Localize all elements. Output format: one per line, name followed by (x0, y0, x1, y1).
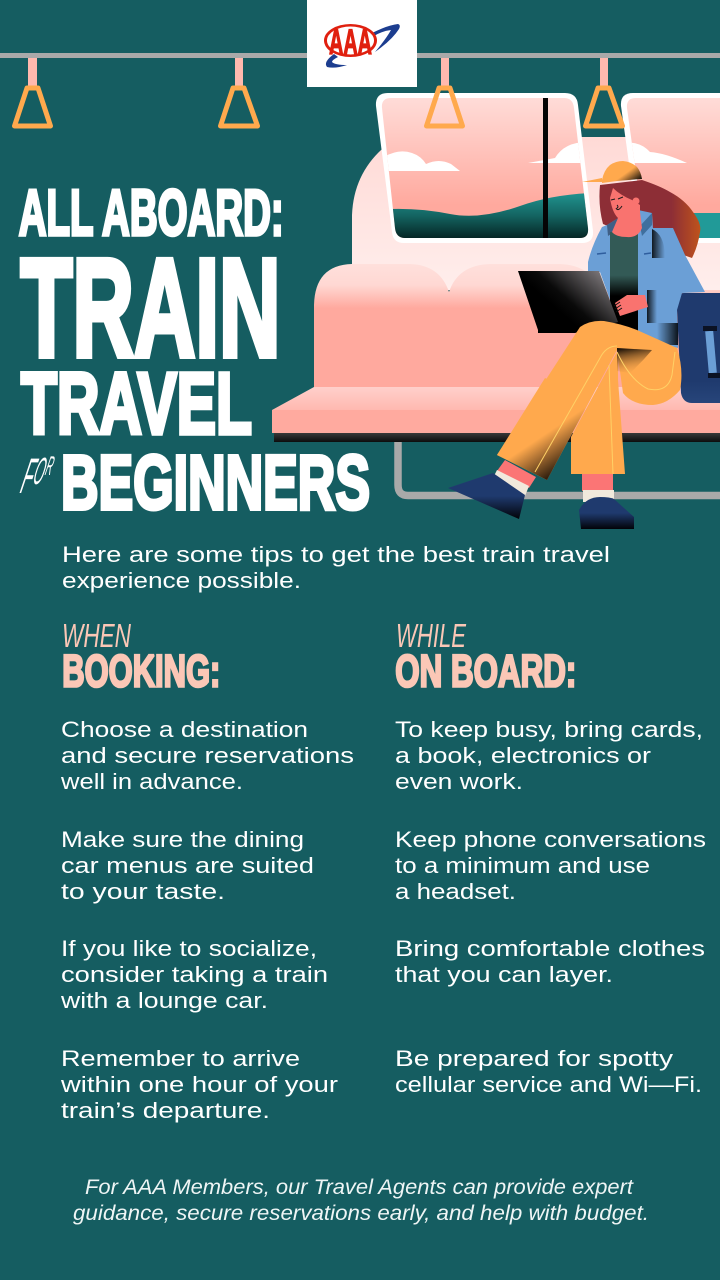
on board tips: Bring comfortable clothes (395, 936, 705, 961)
booking tips: to your taste. (61, 879, 225, 904)
seat cushions (314, 264, 720, 387)
neck and face (610, 188, 642, 237)
on board tips: cellular service and Wi—Fi. (395, 1072, 702, 1097)
cap (602, 161, 642, 183)
seat back upper (352, 137, 720, 290)
booking tips: well in advance. (60, 769, 243, 794)
heading: when booking (62, 617, 220, 697)
jacket (588, 210, 705, 348)
bag (677, 293, 720, 403)
heading: when booking: WHEN (62, 617, 131, 654)
title: TRAVEL (21, 356, 252, 453)
hanging straps (14, 58, 622, 126)
heading: while on board (395, 617, 576, 697)
title: O (29, 452, 51, 493)
AAA logo: AAA (329, 23, 372, 62)
seat base (272, 387, 720, 442)
booking tips: car menus are suited (61, 853, 314, 878)
title: BEGINNERS (61, 440, 370, 526)
laptop (518, 271, 618, 333)
title: R (43, 452, 57, 481)
right sock and shoe (579, 474, 634, 529)
AAA logo (307, 0, 417, 87)
booking tips: consider taking a train (61, 962, 328, 987)
train window left (376, 93, 593, 243)
booking tips: train’s departure. (61, 1098, 270, 1123)
ear (632, 198, 640, 204)
intro text (62, 542, 610, 593)
crossed leg (497, 321, 681, 480)
hair (599, 180, 700, 258)
handrail (0, 53, 720, 58)
title: ALL ABOARD: (19, 176, 284, 249)
booking tips: Make sure the dining (61, 827, 304, 852)
title (16, 176, 370, 526)
booking tips: and secure reservations (61, 743, 354, 768)
seat support bar (398, 442, 720, 496)
rear leg (571, 350, 625, 474)
shirt (610, 232, 638, 335)
footer note (73, 1176, 649, 1225)
intro text: experience possible. (62, 568, 301, 593)
jacket shadows (597, 213, 678, 345)
on board tips: Be prepared for spotty (395, 1046, 673, 1071)
booking tips: within one hour of your (60, 1072, 338, 1097)
illustration: woman with laptop (448, 161, 720, 529)
on board tips: to a minimum and use (395, 853, 650, 878)
face details (611, 197, 623, 210)
booking tips: Remember to arrive (61, 1046, 300, 1071)
leg shading (497, 378, 590, 480)
on board tips: To keep busy, bring cards, (395, 717, 703, 742)
title: TRAIN (20, 230, 280, 386)
booking tips: with a lounge car. (60, 988, 268, 1013)
booking tips: If you like to socialize, (61, 936, 317, 961)
on board tips (395, 717, 706, 1097)
on board tips: Keep phone conversations (395, 827, 706, 852)
on board tips: a book, electronics or (395, 743, 651, 768)
heading: when booking: BOOKING: (62, 646, 220, 697)
on board tips: that you can layer. (395, 962, 613, 987)
on board tips: even work. (395, 769, 523, 794)
heading: while on board: WHILE (396, 617, 467, 654)
footer note: guidance, secure reservations early, and help with budget. (73, 1202, 649, 1225)
title: F (16, 449, 42, 505)
hand (614, 295, 648, 316)
booking tips (60, 717, 354, 1123)
footer note: For AAA Members, our Travel Agents can provide expert (85, 1176, 634, 1199)
left sock and shoe (448, 460, 536, 519)
heading: while on board: ON BOARD: (395, 646, 576, 697)
booking tips: Choose a destination (61, 717, 308, 742)
train window right (620, 93, 720, 243)
intro text: Here are some tips to get the best train travel (62, 542, 610, 567)
on board tips: a headset. (395, 879, 516, 904)
trouser seams (535, 346, 675, 474)
